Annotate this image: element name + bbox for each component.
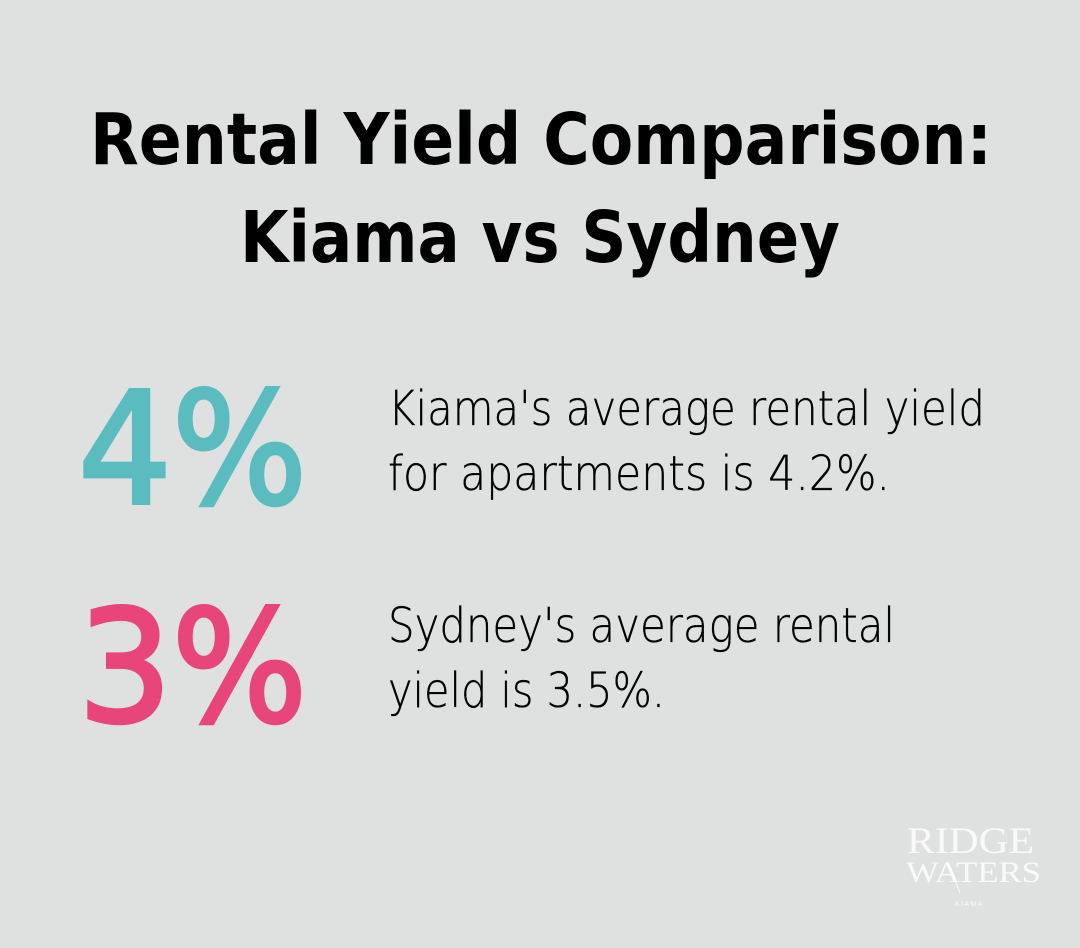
- Sydney description: [388, 598, 895, 719]
- logo: Ridge Waters Kiama: [906, 821, 1041, 908]
- big number 3%: 3: [78, 577, 172, 758]
- logo: Ridge Waters Kiama: KIAMA: [955, 901, 982, 908]
- logo: Ridge Waters Kiama: WATERS: [906, 856, 1041, 889]
- big number 3%: %: [172, 577, 307, 758]
- Kiama description: [388, 381, 985, 502]
- title: Rental Yield Comparison:: [90, 98, 992, 181]
- big number 4%: %: [172, 359, 307, 540]
- Kiama description: for apartments is 4.2%.: [388, 446, 890, 502]
- title: [90, 98, 992, 279]
- big number 4%: 4: [78, 359, 172, 540]
- big number 3%: [78, 577, 307, 758]
- Sydney description: Sydney's average rental: [388, 598, 895, 654]
- stat: Sydney 3%: [78, 577, 895, 758]
- title: Kiama vs Sydney: [240, 196, 840, 279]
- stat: Kiama 4%: [78, 359, 985, 540]
- Sydney description: yield is 3.5%.: [388, 663, 665, 719]
- Kiama description: Kiama's average rental yield: [388, 381, 985, 437]
- logo: Ridge Waters Kiama: RIDGE: [907, 821, 1034, 862]
- big number 4%: [78, 359, 307, 540]
